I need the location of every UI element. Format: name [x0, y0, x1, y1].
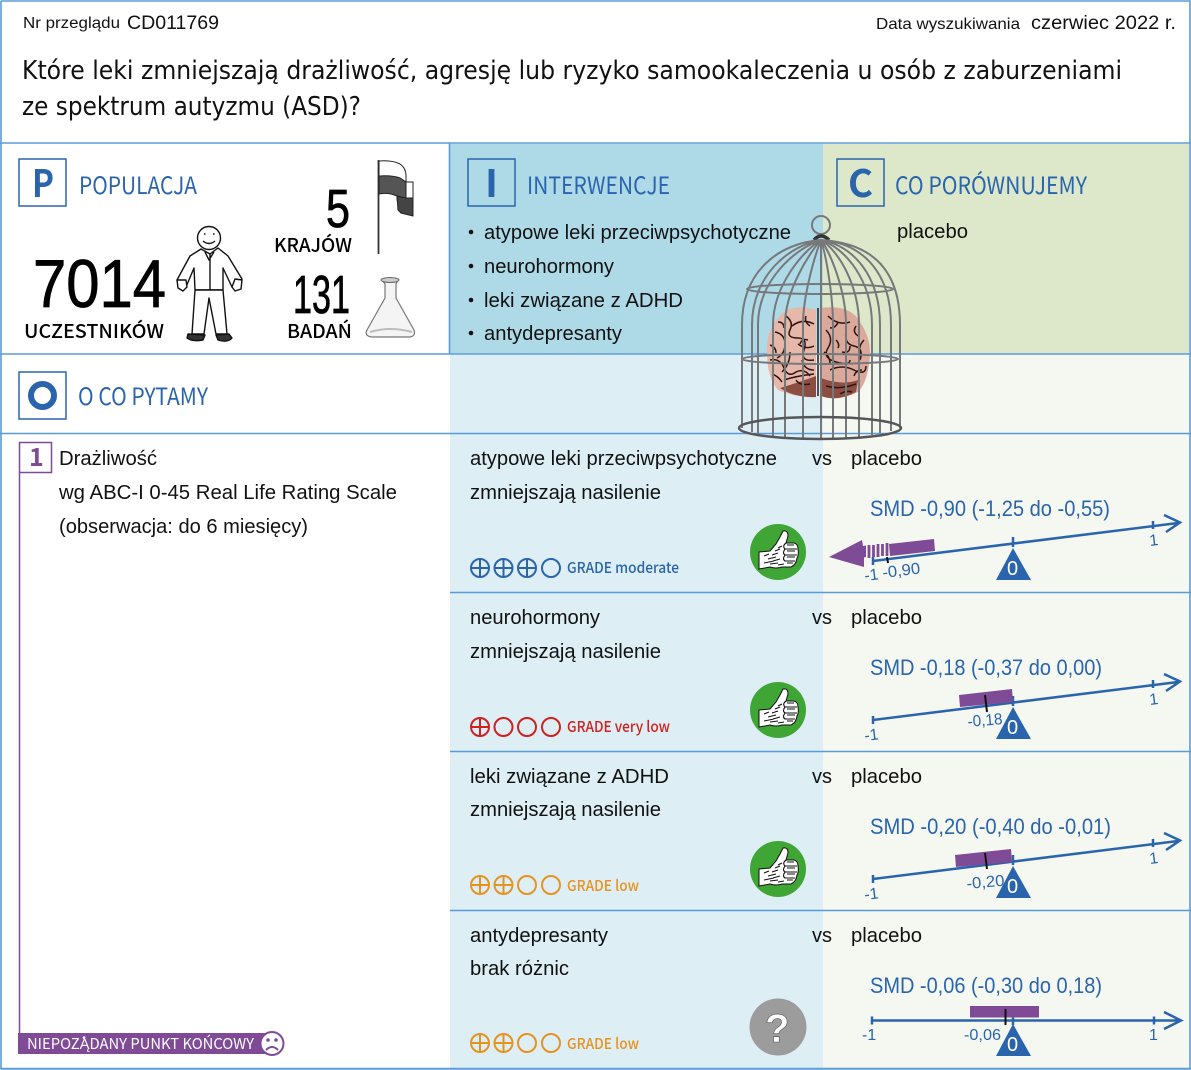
intervention list: atypowe leki przeciwpsychotyczne	[484, 222, 791, 244]
panel: outcome description	[18, 438, 397, 1055]
adverse endpoint label: NIEPOŻĄDANY PUNKT KOŃCOWY	[27, 1033, 254, 1054]
countries count: KRAJÓW	[274, 231, 352, 258]
intervention list	[469, 222, 791, 345]
heading: P population: P	[32, 153, 54, 208]
effect scale: 0	[1007, 558, 1018, 580]
heading: O outcomes	[19, 372, 208, 419]
comparison text: antydepresanty	[470, 925, 608, 947]
icon: flag	[378, 160, 413, 254]
brain	[767, 307, 870, 398]
cage	[739, 216, 901, 439]
comparison text: vs	[812, 607, 832, 629]
heading: I intervention: I	[485, 153, 498, 208]
effect scale: 1	[1149, 1027, 1158, 1044]
comparison text	[470, 448, 922, 504]
effect scale: -1	[863, 566, 880, 585]
outcome number: 1	[29, 438, 44, 474]
intervention list: neurohormony	[484, 256, 614, 278]
GRADE rating	[471, 716, 671, 737]
studies count	[287, 265, 352, 344]
outcome number	[20, 438, 52, 1034]
effect scale: 1	[1148, 850, 1159, 868]
effect scale: -1	[862, 1027, 876, 1044]
heading: P population	[19, 153, 197, 208]
panel text: interventions	[468, 153, 791, 345]
comparison text: placebo	[851, 766, 922, 788]
title: ze spektrum autyzmu (ASD)?	[22, 92, 361, 122]
GRADE rating	[471, 557, 679, 578]
comparison text: zmniejszają nasilenie	[470, 641, 661, 663]
effect scale: -0,90	[881, 560, 921, 582]
heading: P population: POPULACJA	[79, 166, 197, 201]
outcome text: Drażliwość	[59, 448, 157, 470]
countries count	[274, 179, 352, 258]
outcome text: wg ABC-I 0-45 Real Life Rating Scale	[58, 482, 397, 504]
effect scale	[863, 674, 1180, 745]
comparison text: placebo	[851, 607, 922, 629]
heading: O outcomes: O CO PYTAMY	[78, 377, 208, 412]
comparison text: placebo	[851, 925, 922, 947]
participants count: UCZESTNIKÓW	[24, 317, 164, 344]
intervention list: antydepresanty	[484, 323, 622, 345]
icon: person	[177, 226, 242, 341]
GRADE rating: GRADE low	[567, 875, 640, 896]
GRADE rating	[471, 1033, 640, 1054]
effect scale: 1	[1148, 532, 1159, 550]
title	[22, 56, 1122, 122]
result row 1: atypical antipsychotics	[470, 448, 1180, 585]
header: review number: Nr przeglądu	[23, 15, 120, 32]
effect scale: -0,06	[964, 1027, 1001, 1044]
panel: population	[19, 153, 414, 344]
comparison text: zmniejszają nasilenie	[470, 799, 661, 821]
result row 3: ADHD drugs	[470, 766, 1180, 904]
header: search date: Data wyszukiwania	[876, 16, 1020, 33]
panel text: comparison	[837, 153, 1087, 243]
panel: comparison	[823, 144, 1189, 354]
outcome text: (obserwacja: do 6 miesięcy)	[59, 516, 308, 538]
icon: question mark	[750, 998, 806, 1056]
icon: flask	[366, 278, 414, 337]
effect scale: -0,20	[966, 873, 1005, 893]
icon: thumbs up	[750, 841, 806, 897]
effect scale: -1	[863, 726, 880, 745]
outcome text	[58, 448, 397, 538]
effect scale: -0,18	[967, 711, 1003, 731]
header: search date	[876, 12, 1176, 34]
comparison text	[470, 607, 922, 663]
comparison text: vs	[812, 448, 832, 470]
intervention list: leki związane z ADHD	[484, 290, 683, 312]
GRADE rating	[471, 875, 640, 896]
studies count: BADAŃ	[287, 317, 352, 344]
participants count: 7014	[33, 246, 166, 322]
header: review number	[23, 12, 219, 34]
heading: C comparison	[837, 153, 1087, 208]
comparison text: leki związane z ADHD	[470, 766, 669, 788]
header: review number: CD011769	[127, 12, 219, 34]
icon: question mark: ?	[765, 1007, 789, 1051]
heading: C comparison: CO PORÓWNUJEMY	[895, 166, 1087, 201]
comparison text: placebo	[851, 448, 922, 470]
participants count	[24, 246, 166, 344]
GRADE rating: GRADE very low	[567, 716, 671, 737]
comparison text: brak różnic	[470, 958, 569, 980]
heading: I intervention	[468, 153, 670, 208]
comparison text	[470, 925, 922, 980]
comparison text: zmniejszają nasilenie	[470, 482, 661, 504]
effect scale: 0	[1007, 717, 1018, 739]
comparison text: atypowe leki przeciwpsychotyczne	[470, 448, 777, 470]
effect scale	[863, 833, 1180, 904]
illustration: brain in a birdcage	[739, 216, 901, 439]
heading: I intervention: INTERWENCJE	[527, 166, 670, 201]
icon: thumbs up	[750, 524, 806, 580]
effect estimate: SMD -0,18 (-0,37 do 0,00)	[870, 655, 1102, 680]
GRADE rating: GRADE moderate	[567, 557, 679, 578]
effect scale: 0	[1007, 1034, 1018, 1056]
countries count: 5	[326, 179, 350, 239]
panel: comparison results column	[823, 355, 1189, 1069]
panel: intervention results column	[450, 355, 823, 1069]
studies count: 131	[293, 265, 350, 325]
result row 2: neurohormones	[470, 607, 1180, 745]
effect scale: 0	[1007, 876, 1018, 898]
effect scale: 1	[1148, 691, 1159, 709]
comparator text: placebo	[897, 221, 968, 243]
header: search date: czerwiec 2022 r.	[1031, 12, 1176, 34]
effect estimate: SMD -0,90 (-1,25 do -0,55)	[870, 496, 1110, 521]
comparison text: vs	[812, 766, 832, 788]
icon: thumbs up	[750, 682, 806, 738]
GRADE rating: GRADE low	[567, 1033, 640, 1054]
comparison text: neurohormony	[470, 607, 600, 629]
effect estimate: SMD -0,20 (-0,40 do -0,01)	[870, 814, 1111, 839]
effect scale	[862, 1006, 1181, 1056]
effect estimate: SMD -0,06 (-0,30 do 0,18)	[870, 973, 1102, 998]
comparison text: vs	[812, 925, 832, 947]
heading: C comparison: C	[848, 153, 873, 208]
panel: intervention	[450, 144, 823, 354]
comparison text	[470, 766, 922, 821]
effect scale	[829, 515, 1180, 585]
result row 4: antidepressants	[470, 925, 1181, 1056]
effect scale: -1	[863, 885, 880, 904]
